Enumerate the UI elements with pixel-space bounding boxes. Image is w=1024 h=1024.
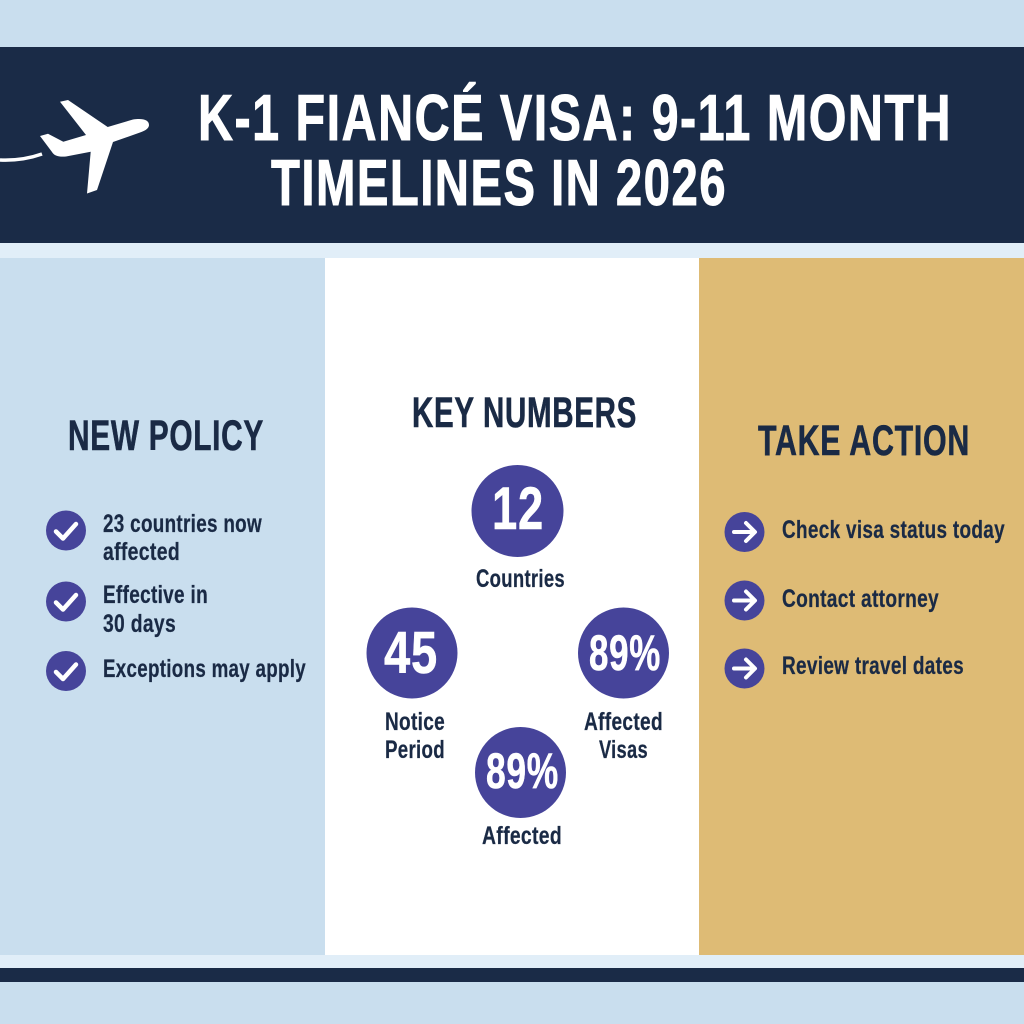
- stat: 45 notice period: 45: [384, 620, 438, 686]
- list item: effective in 30 days: [46, 581, 208, 638]
- stat: 12 countries: [472, 465, 565, 593]
- list item: effective in 30 days: Effective in: [103, 581, 208, 609]
- stat: 89% affected visas: 89%: [589, 625, 661, 681]
- stat: 12 countries: 12: [492, 475, 544, 542]
- action: check visa status: [724, 512, 1005, 552]
- icon: airplane with trail: [0, 100, 149, 194]
- action: contact attorney: [724, 580, 939, 620]
- list item: exceptions: [46, 651, 306, 691]
- stat: 12 countries: Countries: [476, 565, 565, 593]
- list item: 23 countries: 23 countries now: [103, 510, 262, 538]
- action: review travel dates: Review travel dates: [782, 652, 964, 680]
- panel: take action: [699, 258, 1024, 955]
- stat: 89% affected visas: Affected: [584, 708, 663, 736]
- stat: 45 notice period: [366, 608, 458, 764]
- heading: key numbers: KEY NUMBERS: [412, 389, 637, 437]
- action: review travel dates: [724, 648, 964, 688]
- title: TIMELINES IN 2026: [271, 146, 727, 219]
- stat: 89% affected: Affected: [482, 822, 562, 850]
- list item: 23 countries: affected: [103, 538, 180, 566]
- panel: new policy: [0, 258, 325, 955]
- stat: 45 notice period: Notice: [385, 708, 445, 736]
- stat: 45 notice period: Period: [385, 736, 445, 764]
- list item: exceptions: Exceptions may apply: [103, 655, 306, 683]
- panel: key numbers: [325, 258, 699, 955]
- footer bar: [0, 968, 1024, 982]
- list item: effective in 30 days: 30 days: [103, 610, 176, 638]
- stat: 89% affected: 89%: [486, 743, 559, 799]
- stat: 89% affected visas: [578, 608, 669, 764]
- title: [198, 81, 952, 219]
- stat: 89% affected: [475, 727, 566, 850]
- header banner: [0, 47, 1024, 243]
- list item: 23 countries: [46, 510, 262, 566]
- stat: 89% affected visas: Visas: [599, 736, 648, 764]
- heading: new policy: NEW POLICY: [68, 412, 264, 460]
- action: contact attorney: Contact attorney: [782, 585, 939, 613]
